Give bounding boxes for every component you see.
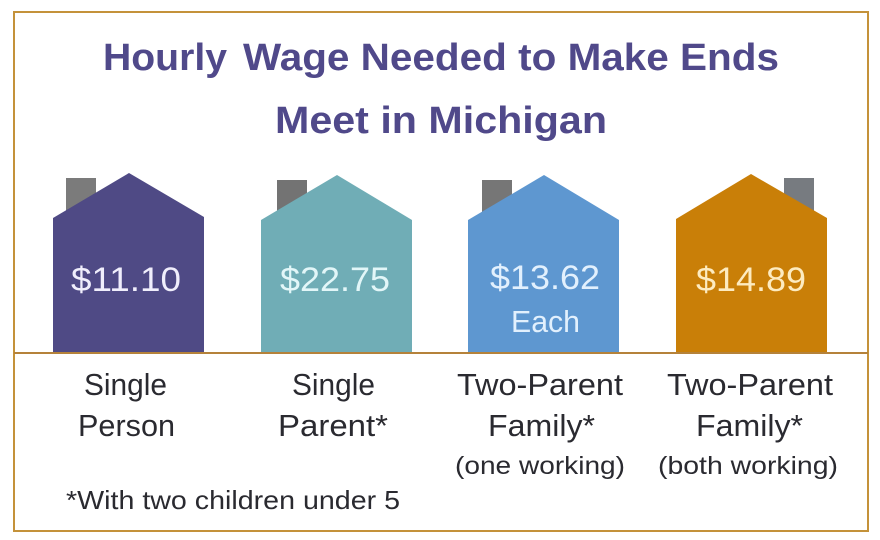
house: two-parent one working xyxy=(468,175,619,352)
label: two-parent one working: Family* xyxy=(488,408,595,443)
label: two-parent both working xyxy=(658,367,838,480)
house: single person: $11.10 xyxy=(71,261,181,299)
footnote: *With two children under 5 xyxy=(66,485,400,515)
house: single person xyxy=(53,173,204,352)
label: single person: Person xyxy=(78,408,175,443)
label: single person: Single xyxy=(84,367,167,402)
house: two-parent one working: Each xyxy=(511,304,580,339)
label: two-parent both working: Two-Parent xyxy=(667,367,833,402)
house: two-parent one working: $13.62 xyxy=(490,259,600,297)
label: two-parent both working: (both working) xyxy=(658,452,838,480)
label: single parent xyxy=(278,367,388,443)
label: two-parent one working xyxy=(455,367,625,480)
house: single parent: $22.75 xyxy=(280,261,390,299)
label: two-parent one working: (one working) xyxy=(455,452,625,480)
label: single parent: Single xyxy=(292,367,375,402)
house: two-parent both working xyxy=(676,174,827,352)
label: single person xyxy=(78,367,175,443)
title: Wage Needed to Make Ends xyxy=(243,37,779,79)
title xyxy=(103,37,779,142)
house: single parent xyxy=(261,175,412,352)
title: Meet in Michigan xyxy=(275,100,607,142)
house: two-parent both working: $14.89 xyxy=(696,261,806,299)
label: two-parent both working: Family* xyxy=(696,408,803,443)
label: two-parent one working: Two-Parent xyxy=(457,367,623,402)
label: single parent: Parent* xyxy=(278,408,388,443)
title: Hourly xyxy=(103,37,227,79)
ground line xyxy=(14,352,868,354)
